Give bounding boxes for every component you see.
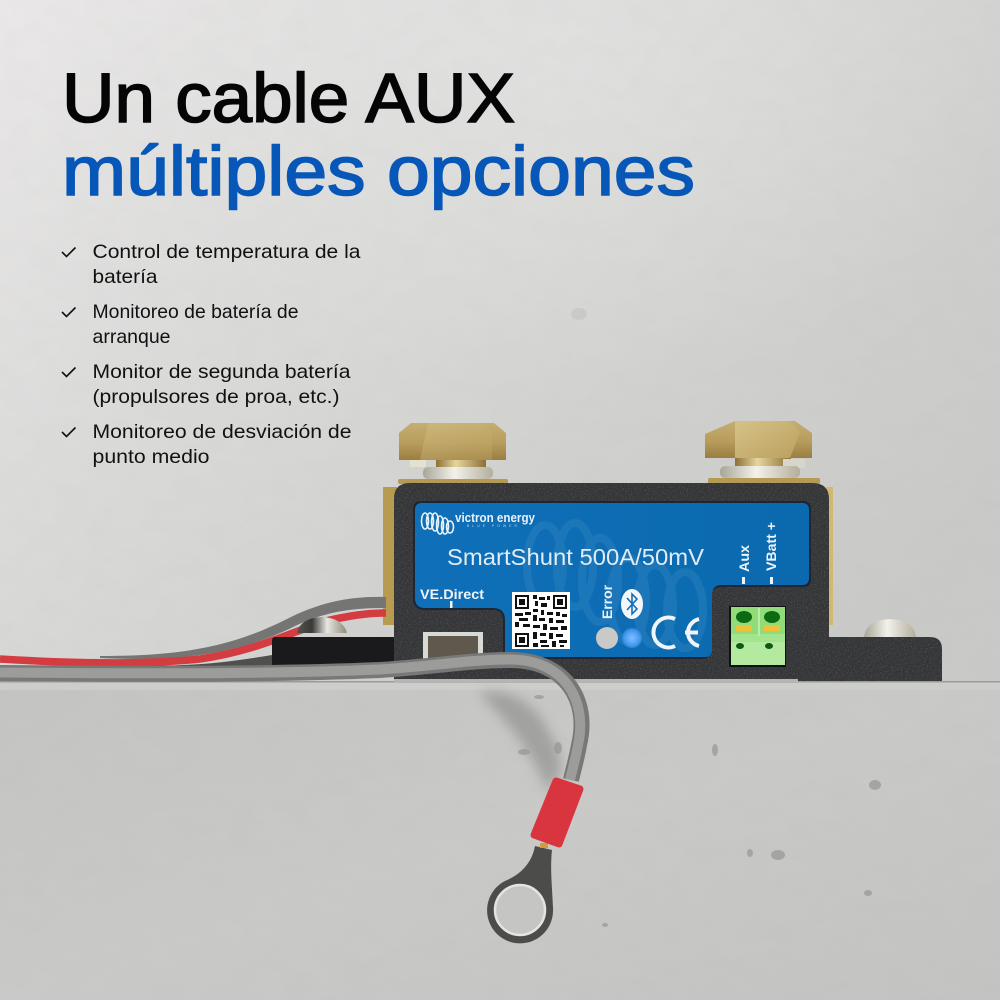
CE mark [653, 618, 699, 648]
VE.Direct port [423, 632, 483, 661]
QR code [512, 592, 570, 649]
watermark coil logo [527, 523, 703, 648]
item 2: arranque [92, 326, 170, 348]
grey wire [100, 597, 386, 659]
blue label panel [413, 501, 811, 659]
victron energy wordmark: victron energy [455, 511, 535, 525]
checklist of AUX options [62, 241, 361, 468]
lower concrete ledge [0, 681, 1000, 1000]
item 4: punto medio [92, 446, 210, 468]
item 3 [62, 361, 351, 408]
title [62, 59, 695, 210]
screw head [297, 617, 347, 633]
bluetooth LED [622, 628, 642, 648]
Aux label: Aux [737, 544, 752, 572]
red insulator [534, 781, 580, 844]
item 4: Monitoreo de desviación de [92, 421, 352, 443]
item 2 [62, 301, 298, 348]
ring terminal [487, 781, 580, 943]
grey AUX cable [0, 660, 582, 780]
title line 1: Un cable AUX [62, 59, 515, 137]
SmartShunt body [394, 483, 942, 682]
VBatt + label: VBatt + [764, 522, 779, 571]
item 2: Monitoreo de batería de [92, 301, 298, 323]
left brass bolt [398, 423, 508, 484]
right brass bolt [705, 421, 820, 484]
item 1: batería [92, 266, 158, 288]
left mounting foot with screw [272, 617, 396, 667]
blue power tagline: BLUE POWER [467, 524, 517, 528]
error LED [596, 627, 618, 649]
item 1 [62, 241, 361, 288]
Error label: Error [600, 584, 615, 619]
bluetooth icon [621, 589, 643, 619]
red wire [0, 613, 386, 663]
item 3: Monitor de segunda batería [92, 361, 351, 383]
background: concrete wall [0, 0, 1000, 683]
metal ring lug [487, 843, 553, 943]
title line 2: múltiples opciones [62, 132, 695, 210]
green AUX terminal block [729, 606, 786, 667]
item 3: (propulsores de proa, etc.) [92, 386, 340, 408]
product name: SmartShunt 500A/50mV [447, 544, 705, 570]
victron logo coil [422, 513, 454, 534]
brass terminal plates [383, 487, 833, 625]
item 4 [62, 421, 352, 468]
lower dark wire [140, 655, 272, 668]
right mounting screw [864, 619, 916, 637]
item 1: Control de temperatura de la [92, 241, 361, 263]
VE.Direct label: VE.Direct [420, 586, 484, 602]
red and grey wires behind the shunt [0, 597, 386, 668]
